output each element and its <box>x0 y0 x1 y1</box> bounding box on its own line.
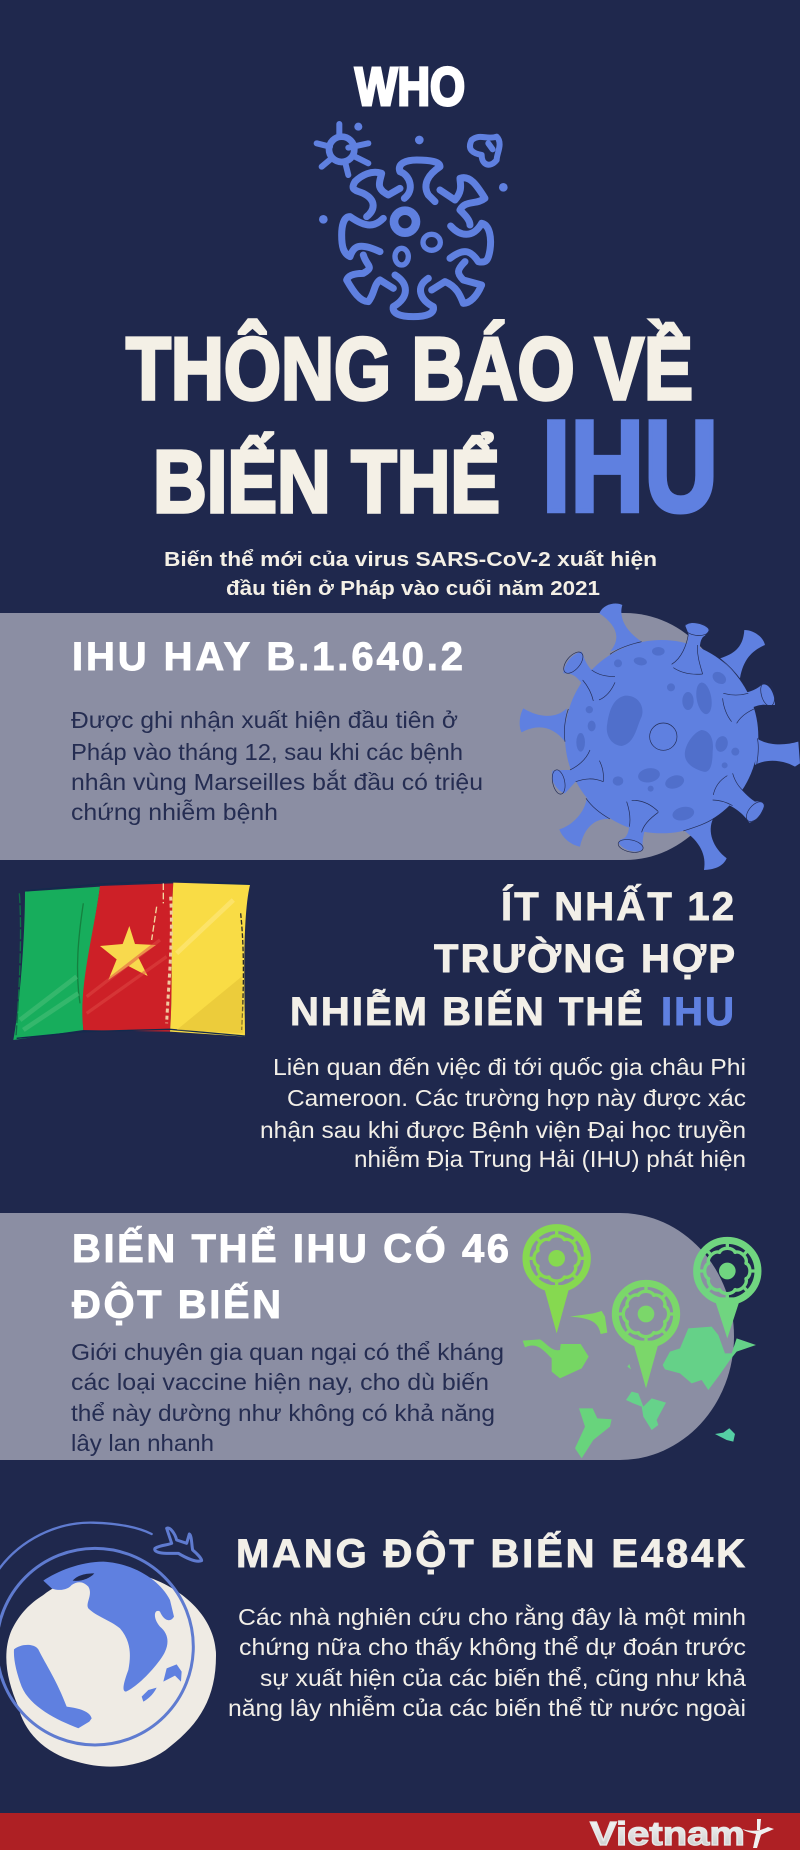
text block: E484K explanation: sự xuất hiện của các biến thể, cũng như khả <box>260 1665 746 1691</box>
panel heading: IHU HAY B.1.640.2 <box>72 635 463 679</box>
subtitle <box>164 549 657 600</box>
panel heading: ĐỘT BIẾN <box>72 1281 281 1327</box>
title highlight: IHU: IHU <box>542 393 718 539</box>
text block: E484K explanation: chứng nữa cho thấy không thể dự đoán trước <box>239 1634 746 1660</box>
panel: IHU has 46 mutations <box>0 1213 734 1460</box>
icon: Cameroon flag <box>13 881 250 1040</box>
text block: Cameroon cases: Liên quan đến việc đi tới quốc gia châu Phi <box>273 1054 746 1080</box>
heading: at least 12 cases: NHIỄM BIẾN THỂ <box>290 987 643 1034</box>
orbit rings <box>0 1523 193 1745</box>
panel body text: thể này dường như không có khả năng <box>71 1400 495 1426</box>
text block: Cameroon cases <box>260 1054 746 1172</box>
panel: IHU hay B.1.640.2 <box>0 613 735 860</box>
panel background <box>0 1213 734 1460</box>
heading: at least 12 cases: IHU <box>661 990 734 1034</box>
continents <box>14 1562 182 1728</box>
text block: E484K explanation <box>228 1604 746 1721</box>
heading: at least 12 cases <box>290 883 735 1034</box>
panel body text: Pháp vào tháng 12, sau khi các bệnh <box>71 739 463 765</box>
icon: map with virus location pins <box>523 1228 758 1458</box>
yellow stripe <box>170 883 250 1037</box>
footer bar <box>0 1813 800 1850</box>
panel background <box>0 613 735 860</box>
panel heading: BIẾN THỂ IHU CÓ 46 <box>72 1224 509 1271</box>
icon: outlined virus cluster <box>317 123 508 317</box>
text block: Cameroon cases: nhận sau khi được Bệnh viện Đại học truyền <box>260 1117 746 1143</box>
heading: WHO: WHO <box>355 57 465 117</box>
panel body text: chứng nhiễm bệnh <box>71 799 278 825</box>
text block: E484K explanation: năng lây nhiễm của các biến thể từ nước ngoài <box>228 1695 746 1721</box>
heading: E484K mutation: MANG ĐỘT BIẾN E484K <box>236 1530 745 1576</box>
green stripe <box>13 887 100 1040</box>
map pin 1 <box>526 1228 587 1333</box>
heading: at least 12 cases: ÍT NHẤT 12 <box>501 883 734 929</box>
panel body text: nhân vùng Marseilles bắt đầu có triệu <box>71 769 483 795</box>
icon: large blue virus <box>520 603 800 870</box>
panel body text: Giới chuyên gia quan ngại có thể kháng <box>71 1339 504 1365</box>
text block: Cameroon cases: nhiễm Địa Trung Hải (IHU) phát hiện <box>354 1146 746 1172</box>
plane <box>155 1528 202 1561</box>
subtitle: Biến thể mới của virus SARS-CoV-2 xuất hiện <box>164 549 657 571</box>
text block: Cameroon cases: Cameroon. Các trường hợp này được xác <box>287 1085 746 1111</box>
map pin 3 <box>697 1240 758 1338</box>
map continents <box>523 1311 756 1458</box>
panel body text: Được ghi nhận xuất hiện đầu tiên ở <box>71 707 458 733</box>
red stripe <box>82 883 173 1032</box>
title line: BIẾN THỂ: BIẾN THỂ <box>153 432 500 531</box>
panel body text <box>71 1339 504 1456</box>
flag star <box>100 926 156 980</box>
globe body <box>6 1570 216 1767</box>
text block: E484K explanation: Các nhà nghiên cứu cho rằng đây là một minh <box>238 1604 746 1630</box>
heading: at least 12 cases: TRƯỜNG HỢP <box>434 935 735 981</box>
panel heading <box>72 1224 509 1327</box>
panel body text: các loại vaccine hiện nay, cho dù biến <box>71 1369 489 1395</box>
icon: globe with orbit and plane <box>0 1523 216 1767</box>
footer logo: Vietnam+ <box>590 1815 774 1850</box>
subtitle: đầu tiên ở Pháp vào cuối năm 2021 <box>226 578 600 600</box>
title line: THÔNG BÁO VỀ: THÔNG BÁO VỀ <box>126 319 693 418</box>
panel body text <box>71 707 483 825</box>
map pin 2 <box>615 1283 677 1388</box>
panel body text: lây lan nhanh <box>71 1430 214 1456</box>
